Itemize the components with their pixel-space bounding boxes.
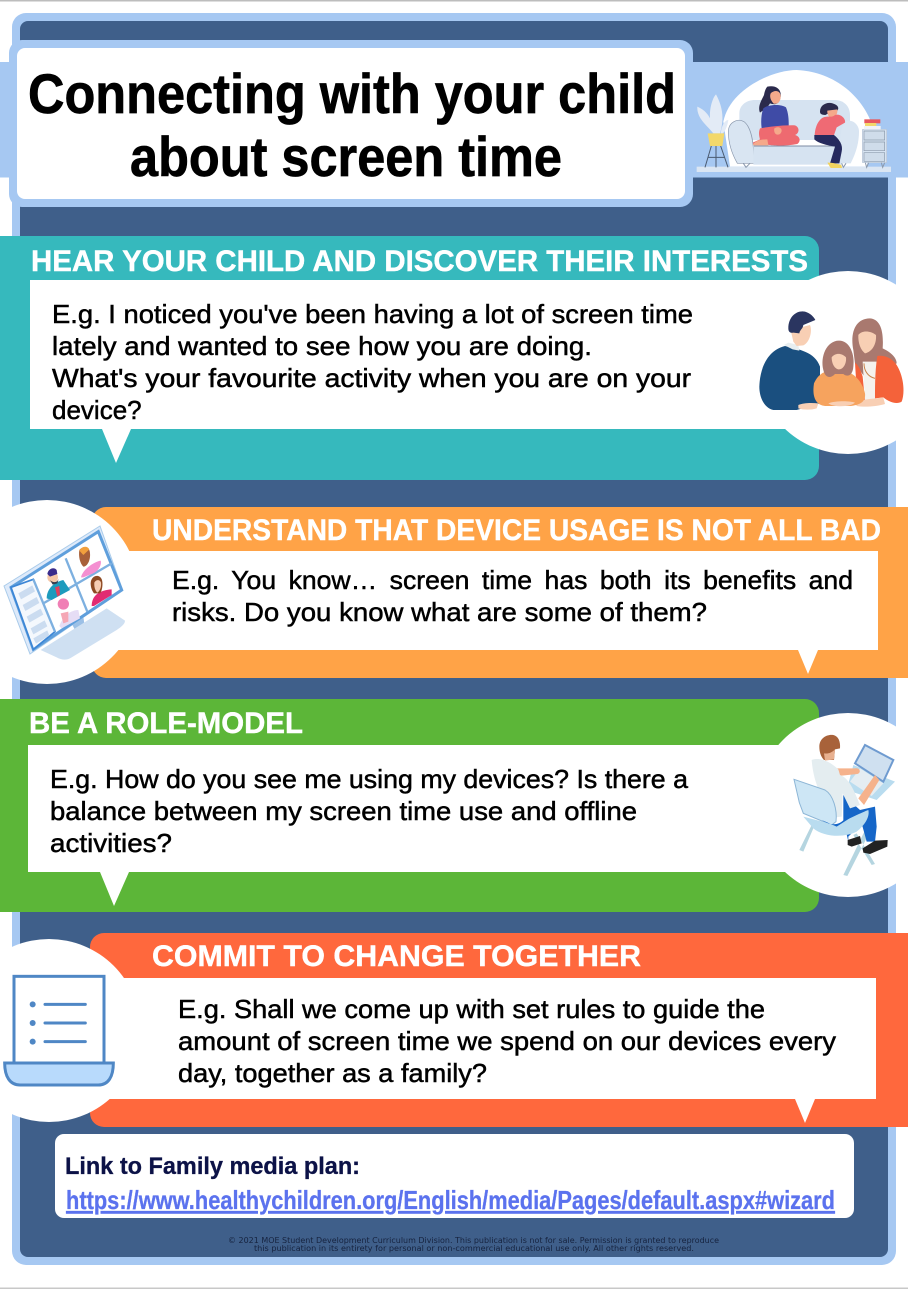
text: understand device usage example: risks. Do you know what are some of them? (172, 597, 707, 627)
text: hear your child example (52, 299, 693, 425)
icon: rules list on device (5, 976, 113, 1085)
panel: title banner (0, 40, 908, 207)
title: about screen time (130, 125, 562, 188)
text: understand device usage example (172, 565, 853, 627)
panel: commit to change together (0, 933, 908, 1127)
text: commit to change example: amount of screen time we spend on our devices every (178, 1026, 836, 1056)
footer: copyright note: this publication in its entirety for personal or non-commercial educational use only. All other rights reserved. (254, 1244, 694, 1253)
icon: parent and child on sofa (697, 70, 891, 172)
text: hear your child example: E.g. I noticed you've been having a lot of screen time (52, 299, 693, 329)
text: hear your child example: What's your favourite activity when you are on your (52, 363, 691, 393)
text: link label: Link to Family media plan: (65, 1153, 360, 1180)
icon: family of three (759, 311, 903, 410)
text: be a role-model example: activities? (50, 828, 172, 858)
text: commit to change example (178, 994, 836, 1088)
panel: be a role-model (0, 699, 908, 912)
text: be a role-model example: balance between my screen time use and offline (50, 796, 637, 826)
text: hear your child example: device? (52, 395, 142, 425)
text: commit to change example: day, together as a family? (178, 1058, 487, 1088)
heading: be a role-model: BE A ROLE-MODEL (29, 707, 303, 740)
text: be a role-model example (50, 764, 689, 858)
panel: hear your child (0, 236, 908, 480)
text: commit to change example: E.g. Shall we come up with set rules to guide the (178, 994, 765, 1024)
icon: video call monitor (4, 526, 125, 660)
heading: hear your child: HEAR YOUR CHILD AND DISCOVER THEIR INTERESTS (31, 245, 808, 278)
footer: copyright note: © 2021 MOE Student Development Curriculum Division. This publication is not for sale. Permission is granted to reproduce (228, 1236, 719, 1245)
footer: copyright note (228, 1236, 719, 1253)
panel: family media plan link (55, 1134, 854, 1218)
heading: commit to change together: COMMIT TO CHANGE TOGETHER (152, 940, 641, 973)
heading: understand device usage: UNDERSTAND THAT DEVICE USAGE IS NOT ALL BAD (152, 514, 881, 547)
title: Connecting with your child (28, 62, 676, 125)
title (28, 62, 676, 188)
text: understand device usage example: E.g. You know… screen time has both its benefits and (172, 565, 853, 595)
text: hear your child example: lately and wanted to see how you are doing. (52, 331, 592, 361)
text: be a role-model example: E.g. How do you see me using my devices? Is there a (50, 764, 689, 794)
panel: understand device usage (0, 500, 908, 684)
icon: person at laptop on chair (794, 735, 895, 876)
